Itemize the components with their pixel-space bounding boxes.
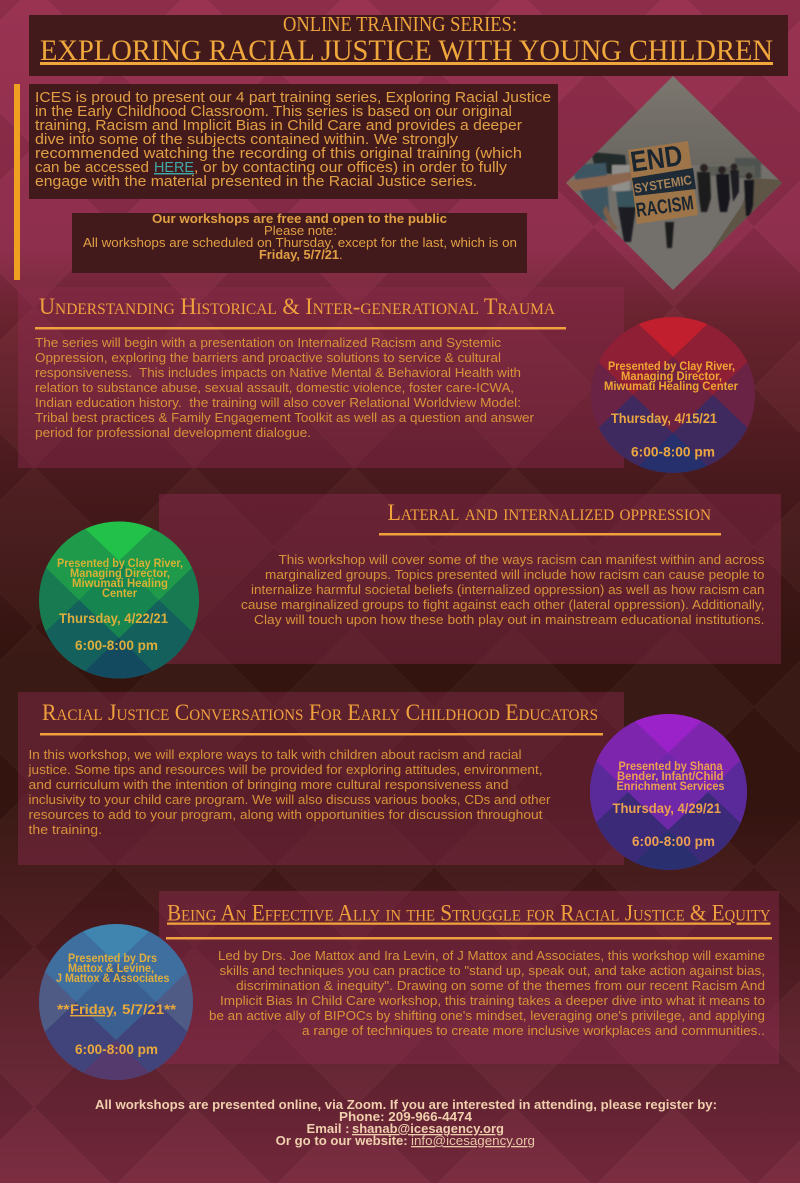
presenter circle 4 (blue): J Mattox & Associates [56,973,170,985]
notice box: Please note: [264,223,337,238]
panel 3 body: resources to add to your program, along with opportunities for discussion throughout [28,807,543,822]
presenter circle 4 (blue): Mattox & Levine, [68,963,154,975]
presenter circle 4 (blue): Presented by Drs [68,953,157,965]
intro text block: engage with the material presented in the Racial Justice series. [35,174,477,190]
intro text block: in the Early Childhood Classroom. This series is based on our original [35,104,512,120]
presenter circle 2 (green): Thursday, 4/22/21 [59,610,168,626]
panel 1 body: The series will begin with a presentation on Internalized Racism and Systemic [35,335,502,350]
footer: registration details: info@icesagency.org [411,1133,535,1148]
panel 2 body: cause marginalized groups to fight against each other (lateral oppression). Additionally, [241,597,764,612]
panel: understanding historical trauma [18,287,624,468]
panel 3 body [27,747,551,837]
panel 3 body: and curriculum with the intention of bringing more cultural responsiveness and [28,777,508,792]
protest sign: END [629,140,684,179]
presenter circle 4 (blue) [39,924,193,1080]
panel 1 body: responsiveness. This includes impacts on Native Mental & Behavioral Health with [35,365,521,380]
panel 1 body: Oppression, exploring the barriers and proactive solutions to service & cultural [35,350,501,365]
panel 3 body: the training. [28,822,102,837]
panel 2 heading: Lateral and internalized oppression [388,500,711,525]
panel: being an effective ally [159,891,779,1064]
panel 4 body: a range of techniques to create more inclusive workplaces and communities.. [302,1023,765,1038]
notice box: Our workshops are free and open to the public [152,211,447,226]
footer: registration details: shanab@icesagency.org [352,1121,504,1136]
intro text block: can be accessed [35,160,149,176]
panel 1 heading: Understanding Historical & Inter-generational Trauma [39,294,555,319]
panel 4 body: Led by Drs. Joe Mattox and Ira Levin, of J Mattox and Associates, this workshop will examine [218,948,765,963]
panel 4 body: discrimination & inequity". Drawing on some of the themes from our recent Racism And [236,978,765,993]
presenter circle 4 (blue): Friday, [70,1001,117,1017]
protest sign: SYSTEMIC [633,172,693,196]
panel 3 body: inclusivity to your child care program. We will also discuss various books, CDs and other [28,792,551,807]
presenter circle 1 (red): Managing Director, [621,371,722,383]
presenter circle 3 (purple): Bender, Infant/Child [617,771,724,783]
intro text block: dive into some of the subjects contained within. We strongly [35,132,459,148]
footer: registration details: All workshops are presented online, via Zoom. If you are interested in attending, please register by: [95,1097,717,1112]
presenter circle 3 (purple) [590,714,747,870]
footer: registration details: Or go to our website: [276,1133,408,1148]
presenter circle 4 (blue): ** [57,1001,70,1017]
intro text block: , or by contacting our offices) in order to fully [194,160,508,176]
footer: registration details: Phone: 209-966-4474 [339,1109,473,1124]
presenter circle 2 (green): Miwumati Healing [72,578,168,590]
notice box: All workshops are scheduled on Thursday, except for the last, which is on [83,235,517,250]
presenter circle 1 (red): 6:00-8:00 pm [631,444,715,460]
panel 4 body: Implicit Bias In Child Care workshop, this training takes a deeper dive into what it means to [220,993,765,1008]
panel 2 body: This workshop will cover some of the ways racism can manifest within and across [278,552,765,567]
panel 4 body [209,948,765,1038]
presenter circle 3 (purple): Enrichment Services [616,781,724,793]
presenter circle 3 (purple): Thursday, 4/29/21 [612,800,721,816]
photo: protest march in diamond frame [566,76,782,290]
notice box: . [339,247,343,262]
panel 2 body: Clay will touch upon how these both play out in mainstream educational institutions. [254,612,764,627]
panel 2 body [241,552,765,627]
intro text block: training, Racism and Implicit Bias in Child Care and provides a deeper [35,118,522,134]
accent bar [14,84,20,280]
panel 3 heading: Racial Justice Conversations For Early Childhood Educators [42,700,598,725]
title banner [29,12,788,76]
presenter circle 2 (green): Presented by Clay River, [57,558,183,570]
panel 1 body: period for professional development dialogue. [35,425,311,440]
presenter circle 2 (green) [39,522,199,678]
presenter circle 3 (purple): Presented by Shana [618,761,723,773]
footer: registration details [95,1097,717,1148]
panel 4 body: be an active ally of BIPOCs by shifting one's mindset, leveraging one's privilege, and applying [209,1008,765,1023]
panel 2 body: marginalized groups. Topics presented will include how racism can cause people to [265,567,764,582]
panel: lateral and internalized oppression [159,494,781,664]
title: series label: ONLINE TRAINING SERIES: [283,12,517,36]
presenter circle 1 (red): Presented by Clay River, [608,361,735,373]
title: main heading: EXPLORING RACIAL JUSTICE WITH YOUNG CHILDREN [40,34,773,67]
panel 1 body [35,335,535,440]
intro text block [29,84,558,199]
presenter circle 3 (purple): 6:00-8:00 pm [632,833,715,849]
panel 1 body: Indian education history. the training will also cover Relational Worldview Model: [35,395,521,410]
presenter circle 1 (red) [591,317,755,473]
panel 2 body: internalize harmful societal beliefs (internalized oppression) as well as how racism can [251,582,764,597]
presenter circle 2 (green): Center [102,588,137,600]
presenter circle 1 (red): Miwumati Healing Center [604,381,739,393]
intro text block: HERE [154,160,194,176]
presenter circle 4 (blue): 6:00-8:00 pm [75,1041,158,1057]
panel: racial justice conversations [18,692,624,865]
protest sign [628,140,698,224]
panel 1 body: Tribal best practices & Family Engagement Toolkit as well as a question and answer [35,410,535,425]
protest sign: RACISM [635,192,695,222]
panel 3 body: justice. Some tips and resources will be provided for exploring attitudes, environment, [27,762,543,777]
panel 3 body: In this workshop, we will explore ways to talk with children about racism and racial [28,747,522,762]
presenter circle 1 (red): Thursday, 4/15/21 [611,410,717,426]
presenter circle 2 (green): 6:00-8:00 pm [75,637,158,653]
panel 4 body: skills and techniques you can practice to "stand up, speak out, and take action against bias, [220,963,765,978]
notice box [72,211,527,273]
presenter circle 4 (blue): 5/7/21** [122,1001,177,1017]
notice box: Friday, 5/7/21 [259,247,339,262]
intro text block: ICES is proud to present our 4 part training series, Exploring Racial Justice [35,90,551,106]
intro text block: recommended watching the recording of this original training (which [35,146,522,162]
panel 1 body: relation to substance abuse, sexual assault, domestic violence, foster care-ICWA, [35,380,514,395]
footer: registration details: Email : [306,1121,350,1136]
presenter circle 2 (green): Managing Director, [70,568,170,580]
